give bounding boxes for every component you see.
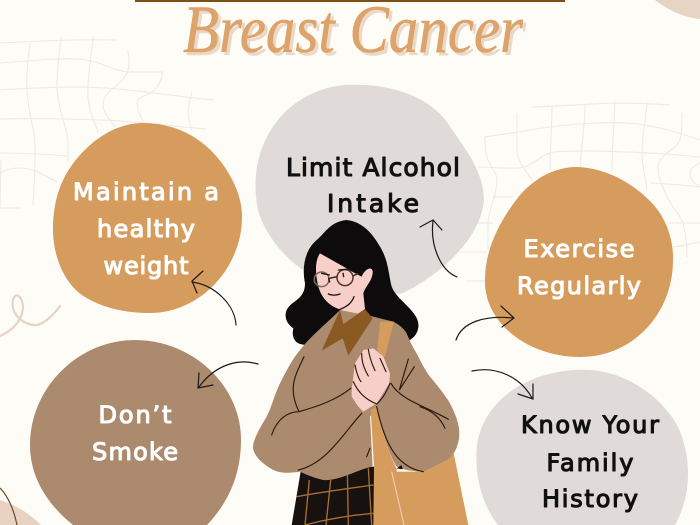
lower bag strap and body: [371, 407, 468, 525]
bag strap: [377, 322, 394, 357]
panel: don't smoke: [30, 340, 241, 525]
eyes, mouth and jaw: [322, 269, 354, 309]
label: exercise regularly: Regularly: [517, 272, 641, 300]
blob: maintain a healthy weight: [53, 123, 242, 313]
panel: maintain a healthy weight: [53, 123, 242, 313]
blob: limit alcohol: [256, 85, 484, 295]
arrow: to family history: [472, 370, 533, 399]
panel: exercise regularly: [485, 167, 673, 357]
label: limit alcohol: Limit Alcohol: [286, 153, 460, 182]
label: maintain a healthy weight: Maintain a: [73, 178, 219, 206]
panel: know your family history: [476, 370, 688, 525]
decorative curve: bottom left: [0, 488, 17, 525]
sweater: [253, 310, 459, 480]
label: maintain a healthy weight: healthy: [97, 215, 195, 243]
arrow: to exercise: [456, 306, 514, 340]
label: don't smoke: Smoke: [92, 438, 178, 466]
glasses: [314, 270, 358, 287]
label: limit alcohol: Intake: [327, 189, 419, 218]
arrow: to don't smoke: [198, 362, 258, 388]
panel: limit alcohol: [256, 85, 484, 295]
blob: exercise regularly: [485, 167, 673, 357]
label: know your family history: Know Your: [521, 411, 659, 439]
arrow: to limit alcohol: [420, 220, 457, 277]
finger lines: [353, 349, 390, 404]
blob: know your family history: [476, 370, 688, 525]
label: don't smoke: Don’t: [98, 401, 172, 429]
face and neck: [316, 253, 373, 324]
label: maintain a healthy weight: weight: [104, 252, 188, 280]
sweater fold lines: [272, 357, 448, 472]
decorative squiggle: [0, 295, 60, 336]
illustration: woman: [253, 220, 468, 525]
label: know your family history: Family: [546, 449, 634, 477]
skirt: [292, 467, 375, 525]
blob: don't smoke: [30, 340, 241, 525]
label: know your family history: History: [542, 485, 638, 513]
collar: [322, 309, 373, 356]
label: exercise regularly: Exercise: [524, 235, 634, 263]
hair: [286, 220, 418, 350]
hand: [352, 348, 390, 412]
corner shape: top right: [655, 0, 700, 19]
arrow: to healthy weight: [192, 271, 236, 325]
corner shape: bottom left: [0, 500, 41, 525]
top rule: [135, 0, 565, 2]
